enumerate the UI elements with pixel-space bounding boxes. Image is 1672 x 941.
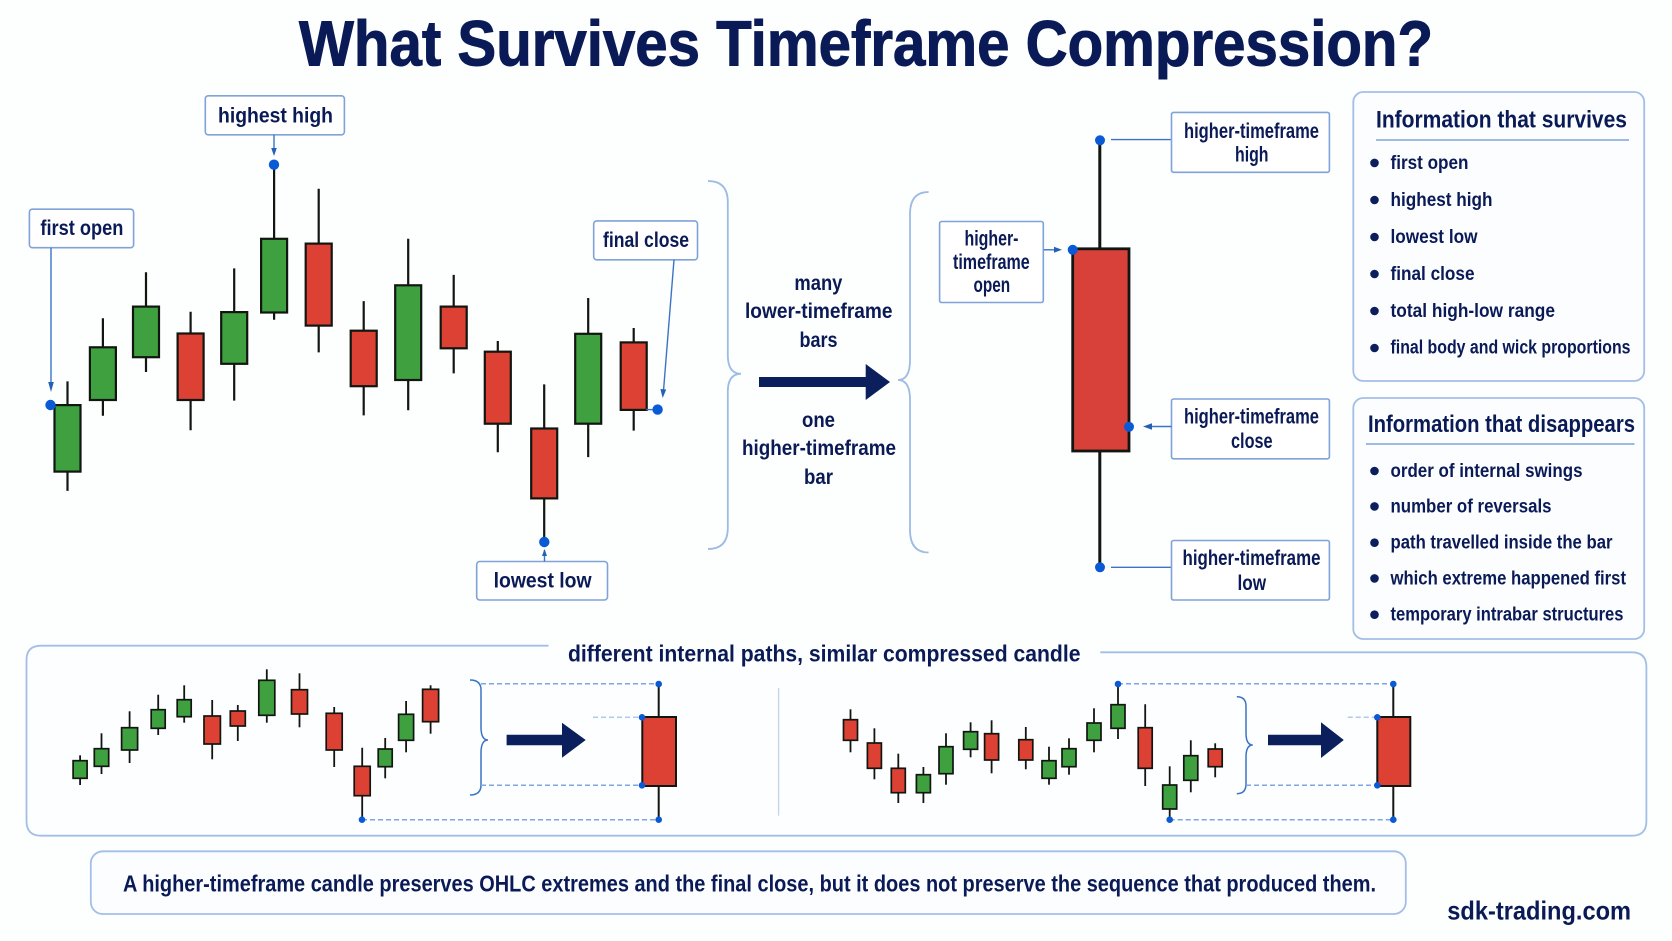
callout: first open: first open — [40, 217, 123, 240]
list: survives: highest high — [1390, 190, 1492, 211]
list: disappears — [1370, 461, 1627, 626]
label: higher-timeframe low — [1111, 540, 1329, 600]
brace and projection lines: path two — [1118, 684, 1393, 820]
list: survives: final body and wick proportions — [1390, 338, 1630, 358]
text: one higher-timeframe bar: bar — [804, 466, 833, 489]
text: many lower-timeframe bars: lower-timeframe — [745, 300, 892, 323]
arrow: compression — [759, 364, 890, 400]
compressed candle: path two — [1115, 681, 1410, 823]
text: many lower-timeframe bars — [745, 272, 892, 352]
callout: highest high — [205, 96, 344, 170]
text: one higher-timeframe bar: higher-timeframe — [742, 437, 896, 460]
label: higher-timeframe open — [940, 222, 1062, 302]
text: one higher-timeframe bar: one — [802, 409, 835, 432]
list: survives — [1370, 153, 1630, 358]
heading: survives: Information that survives — [1376, 106, 1627, 133]
label: higher-timeframe open: timeframe — [953, 251, 1030, 274]
title: What Survives Timeframe Compression? — [299, 8, 1433, 80]
panel heading: different internal paths, similar compressed candle — [568, 641, 1080, 667]
list: disappears: order of internal swings — [1390, 461, 1582, 482]
website credit: sdk-trading.com — [1447, 895, 1631, 925]
list: disappears: temporary intrabar structures — [1390, 604, 1624, 626]
footer takeaway — [91, 851, 1406, 914]
label: higher-timeframe high — [1111, 112, 1329, 172]
brace: closing lower-timeframe group — [708, 181, 741, 549]
list: survives: lowest low — [1390, 227, 1478, 248]
candlestick chart: many lower-timeframe bars — [54, 165, 647, 541]
label: higher-timeframe open: open — [974, 274, 1010, 297]
arrow: path two — [1268, 722, 1344, 758]
list: survives: final close — [1390, 264, 1474, 285]
brace and projection lines: path one — [362, 680, 659, 820]
label: higher-timeframe low: higher-timeframe — [1182, 547, 1320, 570]
text: one higher-timeframe bar — [742, 409, 896, 489]
list: survives: total high-low range — [1390, 301, 1555, 322]
compressed candle: path one — [359, 681, 676, 823]
callout: highest high: highest high — [218, 105, 333, 128]
panel: information that disappears — [1353, 398, 1644, 639]
panel: information that survives — [1353, 92, 1644, 381]
label: higher-timeframe open: higher- — [964, 227, 1018, 250]
panel: different internal paths — [26, 641, 1646, 836]
list: disappears: number of reversals — [1390, 496, 1552, 518]
text: many lower-timeframe bars: many — [794, 272, 843, 295]
callout: lowest low — [477, 537, 608, 600]
footer takeaway: A higher-timeframe candle preserves OHLC extremes and the final close, but it does not preserve the sequence that produced them. — [123, 871, 1376, 897]
callout: lowest low: lowest low — [494, 569, 592, 592]
list: disappears: path travelled inside the bar — [1390, 532, 1613, 554]
list: disappears: which extreme happened first — [1390, 568, 1627, 590]
callout: final close — [594, 221, 698, 415]
label: higher-timeframe close — [1143, 399, 1329, 459]
list: survives: first open — [1390, 153, 1468, 174]
label: higher-timeframe low: low — [1238, 572, 1267, 595]
text: many lower-timeframe bars: bars — [800, 329, 838, 352]
callout: final close: final close — [603, 229, 689, 252]
mini chart: path two — [844, 684, 1222, 820]
callout: first open — [29, 209, 134, 410]
big higher-timeframe candle — [1068, 135, 1134, 572]
arrow: path one — [507, 723, 586, 758]
mini chart: path one — [73, 669, 439, 819]
brace: opening higher-timeframe candle — [898, 192, 929, 552]
label: higher-timeframe close: higher-timeframe — [1184, 406, 1319, 429]
label: higher-timeframe close: close — [1231, 430, 1273, 453]
label: higher-timeframe high: higher-timeframe — [1184, 120, 1319, 143]
label: higher-timeframe high: high — [1235, 144, 1268, 167]
